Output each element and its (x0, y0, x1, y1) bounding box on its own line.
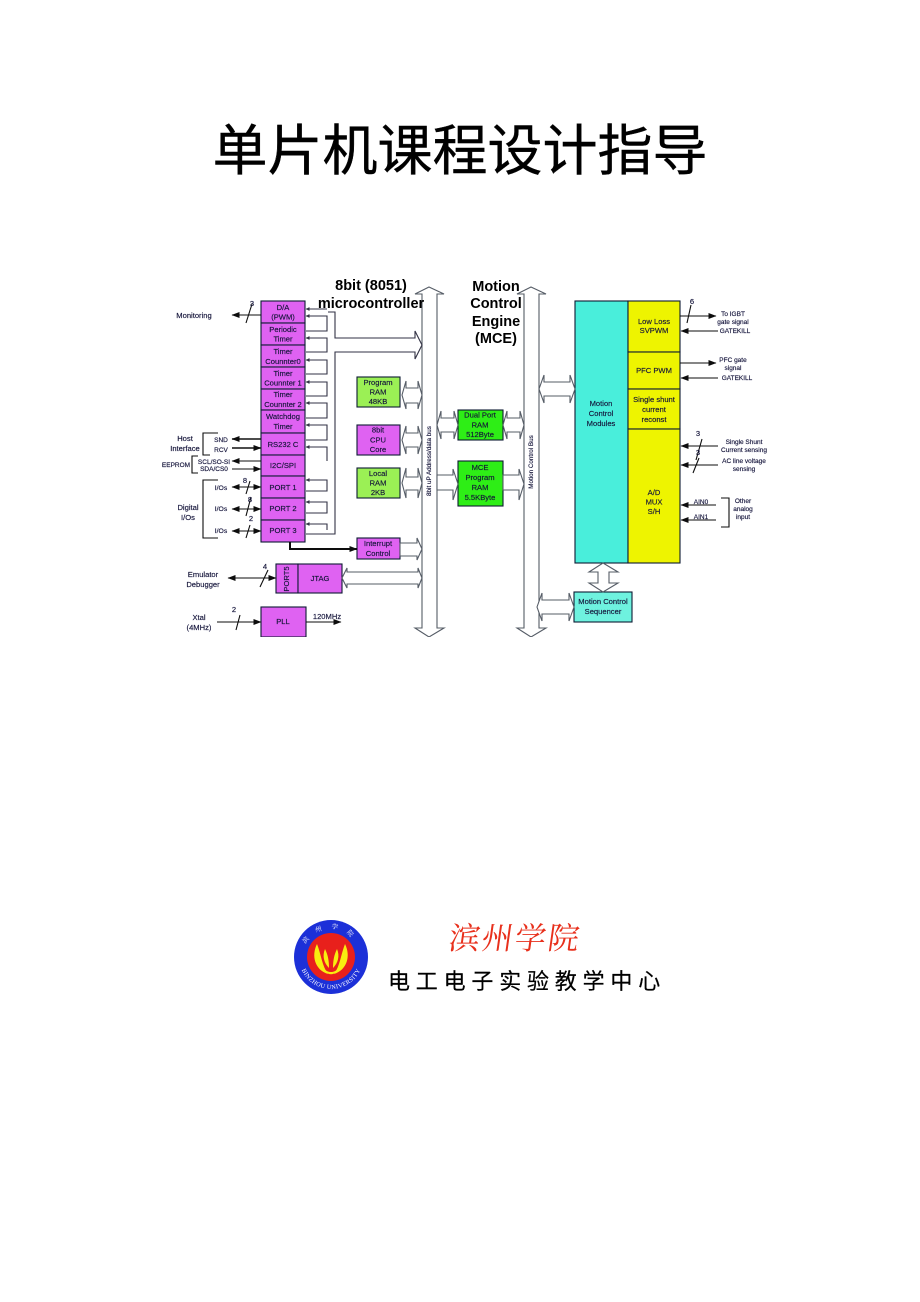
single shunt current reconst (628, 389, 680, 429)
MCE program RAM block: 5.5KByte (465, 493, 495, 502)
section headings: 8bit (8051) (335, 278, 407, 294)
section headings: Engine (472, 314, 520, 330)
signal labels: Emulator (188, 570, 219, 579)
title: 单片机课程设计指导 (212, 120, 708, 182)
block diagram (162, 278, 767, 637)
PFC PWM (628, 352, 680, 389)
motion control modules: Control (589, 409, 614, 418)
port 3 block: PORT 3 (269, 526, 297, 535)
signal labels: Host (177, 434, 194, 443)
CPU core block: Core (370, 445, 386, 454)
program RAM block: 48KB (369, 397, 387, 406)
dual port RAM block: 512Byte (466, 430, 494, 439)
timer 2 block: Timer (273, 390, 293, 399)
PLL block: PLL (276, 617, 290, 626)
timer 2 block: Counnter 2 (264, 400, 302, 409)
program RAM block (357, 377, 400, 407)
signal labels: Monitoring (176, 311, 212, 320)
timer 1 block (261, 367, 305, 389)
local RAM block: Local (369, 469, 387, 478)
signal labels: Digital (177, 503, 199, 512)
dual port RAM block: RAM (472, 420, 488, 430)
signal labels: Interface (170, 444, 200, 453)
A/D MUX S/H: A/D (648, 488, 661, 497)
signal labels: (4MHz) (187, 623, 212, 632)
bus: 8bit uP address/data (415, 287, 444, 637)
interrupt control block: Control (366, 549, 391, 558)
D/A block: D/A (277, 303, 290, 312)
motion control modules: Modules (587, 419, 616, 428)
port 2 block: PORT 2 (269, 504, 297, 513)
signal labels: 3 (250, 299, 254, 308)
signal labels (162, 297, 767, 632)
port 1 block (261, 476, 305, 498)
signal labels: 8 (248, 495, 252, 504)
signal labels: 2 (249, 514, 253, 523)
CPU core block: CPU (370, 436, 386, 444)
signal labels: I/Os (181, 513, 195, 522)
watchdog block: Watchdog (266, 412, 300, 421)
signal labels: Current sensing (721, 447, 767, 454)
signal labels: SCL/SO-SI (198, 459, 230, 466)
signal labels: 3 (696, 429, 700, 438)
local RAM block (357, 468, 400, 498)
dual port RAM block: Dual Port (464, 410, 497, 420)
timer 0 block: Counnter0 (265, 357, 301, 366)
periodic timer block (261, 323, 305, 345)
signal labels: 120MHz (313, 612, 341, 621)
timer 2 block (261, 389, 305, 410)
port 2 block (261, 498, 305, 520)
motion control sequencer: Sequencer (585, 607, 622, 616)
signal labels: gate signal (717, 319, 749, 326)
signal labels: I/Os (215, 506, 228, 513)
university logo (294, 920, 368, 994)
MCE program RAM block (458, 461, 503, 506)
low loss SVPWM: Low Loss (638, 317, 670, 326)
section headings: microcontroller (318, 296, 425, 312)
D/A block: (PWM) (271, 312, 295, 322)
single shunt current reconst: reconst (642, 415, 667, 424)
timer 0 block (261, 345, 305, 367)
signal labels: I/Os (215, 485, 228, 492)
program RAM block: RAM (370, 388, 386, 396)
signal labels: 4 (263, 562, 267, 571)
periodic timer block: Periodic (269, 325, 297, 334)
signal labels: Other (735, 498, 752, 505)
signal labels: 3 (696, 448, 700, 457)
JTAG block: JTAG (311, 574, 330, 583)
timer 1 block: Counnter 1 (264, 378, 302, 388)
low loss SVPWM: SVPWM (640, 326, 668, 335)
university logo: 滨州学院 (302, 923, 354, 944)
port 1 block: PORT 1 (269, 483, 297, 492)
timer 1 block: Timer (273, 369, 293, 378)
motion control sequencer (574, 592, 632, 622)
signal labels: SDA/CS0 (200, 466, 228, 473)
MCE program RAM block: MCE (472, 463, 488, 472)
CPU core block (357, 425, 400, 455)
department name: 电工电子实验教学中心 (388, 969, 666, 994)
school name calligraphy: 滨州学院 (447, 921, 584, 956)
signal labels: sensing (733, 466, 756, 473)
signal labels: I/Os (215, 528, 228, 535)
comb wiring: peripherals to bus (306, 309, 422, 534)
peripheral column (261, 301, 680, 637)
bus: motion control (517, 287, 546, 637)
watchdog block: Timer (273, 422, 293, 431)
local RAM block: RAM (370, 478, 386, 488)
PLL block (261, 607, 306, 637)
RS232C block: RS232 C (268, 440, 299, 449)
periodic timer block: Timer (273, 334, 293, 344)
signal labels: GATEKILL (722, 375, 753, 382)
signal labels: AIN0 (694, 499, 709, 506)
signal labels: GATEKILL (720, 328, 751, 335)
signal labels: Xtal (192, 613, 206, 622)
signal labels: To IGBT (721, 311, 745, 318)
A/D MUX S/H: S/H (648, 507, 660, 516)
motion control modules (575, 301, 628, 563)
interrupt control block: Interrupt (364, 539, 393, 548)
MCE program RAM block: Program (465, 473, 495, 482)
RS232C block (261, 433, 305, 455)
CPU core block: 8bit (372, 426, 385, 434)
single shunt current reconst: current (642, 405, 667, 414)
signal labels: AC line voltage (722, 458, 766, 465)
motion control sequencer: Motion Control (578, 597, 628, 606)
single shunt current reconst: Single shunt (633, 395, 676, 404)
block arrows (342, 375, 618, 621)
signal labels: 8 (243, 476, 247, 485)
I2C/SPI block: I2C/SPI (270, 461, 296, 470)
local RAM block: 2KB (371, 488, 385, 497)
signal labels: signal (725, 365, 742, 372)
port 5 block (276, 564, 298, 593)
section headings: Motion (472, 279, 520, 295)
interrupt control block (357, 538, 400, 559)
section headings: Control (470, 296, 522, 312)
A/D MUX S/H: MUX (646, 498, 662, 506)
motion control modules: Motion (590, 399, 612, 408)
signal labels: 2 (232, 605, 236, 614)
signal labels: Debugger (186, 580, 220, 589)
signal labels: Single Shunt (726, 439, 763, 446)
signal labels: analog (733, 506, 753, 513)
signal labels: PFC gate (719, 357, 747, 364)
PFC PWM: PFC PWM (636, 366, 672, 375)
signal labels: input (736, 514, 750, 521)
signal labels: SND (214, 437, 228, 444)
dual port RAM block (458, 410, 503, 440)
signal labels: AIN1 (694, 514, 709, 521)
low loss SVPWM (628, 301, 680, 352)
signal labels: EEPROM (162, 462, 190, 469)
section headings: (MCE) (475, 331, 517, 347)
D/A block (261, 301, 305, 323)
system buses (415, 287, 546, 637)
signal labels: 6 (690, 297, 694, 306)
JTAG block (298, 564, 342, 593)
section headings (318, 278, 522, 347)
port 5 block: PORT5 (282, 566, 291, 592)
university logo: BINZHOU UNIVERSITY (302, 968, 360, 990)
timer 0 block: Timer (273, 347, 293, 356)
signal labels: Motion Control Bus (528, 435, 535, 489)
signal labels: RCV (214, 447, 229, 454)
watchdog block (261, 410, 305, 433)
signal arrows (192, 304, 729, 630)
port 3 block (261, 520, 305, 542)
A/D MUX S/H (628, 429, 680, 563)
signal labels: 8bit uP Address/data bus (426, 426, 433, 496)
MCE program RAM block: RAM (472, 483, 488, 492)
program RAM block: Program (363, 378, 393, 387)
I2C/SPI block (261, 455, 305, 476)
